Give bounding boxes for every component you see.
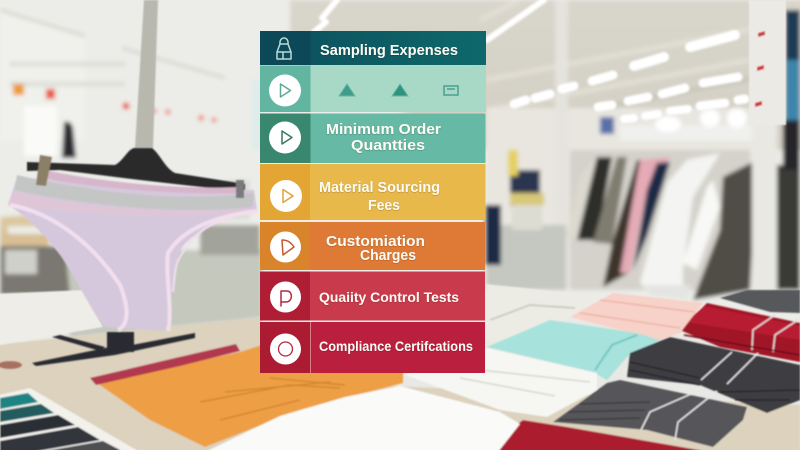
row: minimum order quantities <box>260 114 486 163</box>
row: material sourcing fees: Fees <box>368 197 400 214</box>
folded pink stack <box>570 293 703 340</box>
folded maroon stack <box>680 303 800 362</box>
row: minimum order quantities: Quantties <box>351 137 425 154</box>
icon: building <box>277 38 291 59</box>
cutting table <box>0 317 800 450</box>
colour swatch card <box>0 388 145 450</box>
row: customisation charges: Charges <box>360 247 416 264</box>
row: quality control tests: Quaiity Control Tests <box>319 290 459 305</box>
folded white shirt <box>205 386 520 450</box>
icon: triangle one <box>339 84 355 96</box>
ceiling lights <box>314 0 745 119</box>
row: compliance certifications <box>260 322 485 373</box>
rack garments <box>570 150 750 290</box>
folded red shirt <box>494 420 710 450</box>
garment body <box>8 177 257 331</box>
white fabric right rear <box>486 284 600 342</box>
row: quality control tests <box>260 272 485 320</box>
hanger <box>27 148 245 192</box>
background: blurred factory showroom <box>0 0 800 338</box>
leg trim <box>10 205 127 330</box>
ceiling <box>290 0 800 150</box>
row: material sourcing fees <box>260 164 486 220</box>
icon: box <box>444 86 458 95</box>
icon: triangle two <box>392 84 408 96</box>
row: compliance certifications: Compliance Certifcations <box>319 339 473 354</box>
floor and blurred workspace, left <box>60 250 262 338</box>
row: customisation charges: Customiation <box>326 233 425 250</box>
folded aqua stack <box>487 320 660 380</box>
folded dark stack rear <box>720 290 800 313</box>
row: material sourcing fees: Material Sourcing <box>319 179 440 196</box>
lace waistband <box>15 175 254 210</box>
row: minimum order quantities: Minimum Order <box>326 121 441 138</box>
stand base <box>32 332 195 366</box>
folded grey stack <box>553 380 747 447</box>
row: customisation charges <box>260 222 485 270</box>
floor and blurred workspace, right <box>486 225 566 290</box>
heading: Sampling Expenses <box>320 42 458 59</box>
price tag <box>36 155 52 186</box>
folded charcoal stack <box>627 337 800 413</box>
sample underwear on hanger stand <box>8 148 257 366</box>
header: sampling expenses <box>260 31 486 65</box>
folded white stack <box>405 348 597 417</box>
foreground table and garments <box>0 284 800 450</box>
stray fabric scrap <box>0 361 22 369</box>
hanging label sign <box>749 0 786 125</box>
row: unlabeled icons <box>260 66 486 112</box>
folded orange garment <box>90 344 403 447</box>
metal pole <box>135 0 158 148</box>
panel: cost list <box>260 31 486 373</box>
white table cover left <box>0 290 103 346</box>
